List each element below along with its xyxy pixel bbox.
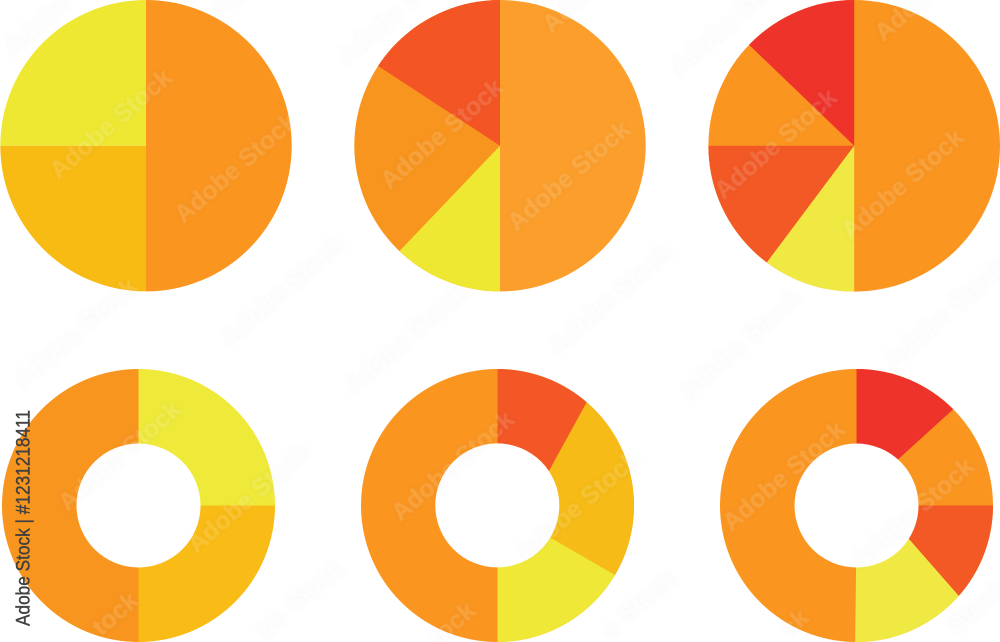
watermark pattern: Adobe Stock: [846, 452, 980, 574]
slice: amber quarter: [138, 506, 275, 642]
donut hole: [794, 444, 918, 568]
donut chart: three segments: [2, 369, 275, 642]
watermark pattern: be Stock: [252, 553, 349, 642]
slice: red-orange: [708, 146, 854, 262]
watermark pattern: Adobe Stock: [339, 278, 473, 400]
slice: half orange: [146, 0, 292, 291]
watermark pattern: Adobe Stock: [709, 83, 843, 205]
slice: half orange: [708, 0, 1000, 292]
watermark pattern: Adobe Stock: [717, 415, 851, 537]
watermark pattern: tock: [87, 586, 144, 641]
stock image ID text: Adobe Stock | #1231218411: [14, 410, 34, 626]
donut ring slices: [720, 369, 993, 642]
slice: yellow: [400, 146, 500, 292]
slice: half light orange: [500, 0, 646, 292]
watermark pattern: Adobe Stock: [511, 445, 645, 567]
watermark pattern: Adobe Stock: [44, 63, 178, 185]
slice: amber quarter: [0, 146, 146, 291]
donut chart: five segments: [720, 369, 993, 642]
slice: yellow quarter: [138, 369, 275, 506]
watermark pattern: Adobe Stock: [544, 238, 678, 360]
watermark pattern: Adobe Stock: [674, 283, 808, 405]
watermark pattern: Adobe Stock: [386, 405, 520, 527]
watermark pattern: Adobe Stock: [53, 395, 187, 517]
watermark pattern: Adobe Stock: [9, 272, 143, 394]
slice: yellow quarter: [0, 0, 146, 146]
donut hole: [435, 443, 559, 567]
pie chart: three segments: [0, 0, 292, 291]
donut ring slices: [361, 369, 634, 642]
watermark pattern: Adobe Stock: [216, 230, 350, 352]
watermark pattern: Adobe Stock: [836, 123, 970, 245]
pie chart: four segments: [343, 0, 646, 292]
pie chart: five segments: [700, 0, 1000, 297]
slice: yellow: [767, 146, 854, 292]
watermark pattern: Adobe Stock: [502, 115, 636, 237]
watermark pattern: Adobe Stock: [375, 73, 509, 195]
slice: red: [749, 0, 854, 146]
slice: red-orange: [378, 0, 500, 146]
watermark pattern: Adobe Stock: [182, 437, 316, 559]
donut chart: four segments: [361, 369, 634, 642]
watermark pattern: e Stock: [596, 563, 682, 642]
watermark pattern: ck: [775, 603, 814, 642]
slice: half orange: [2, 369, 138, 642]
donut hole: [76, 444, 200, 568]
watermark pattern: Adobe Stock: [169, 107, 303, 229]
slice: orange: [354, 0, 500, 292]
